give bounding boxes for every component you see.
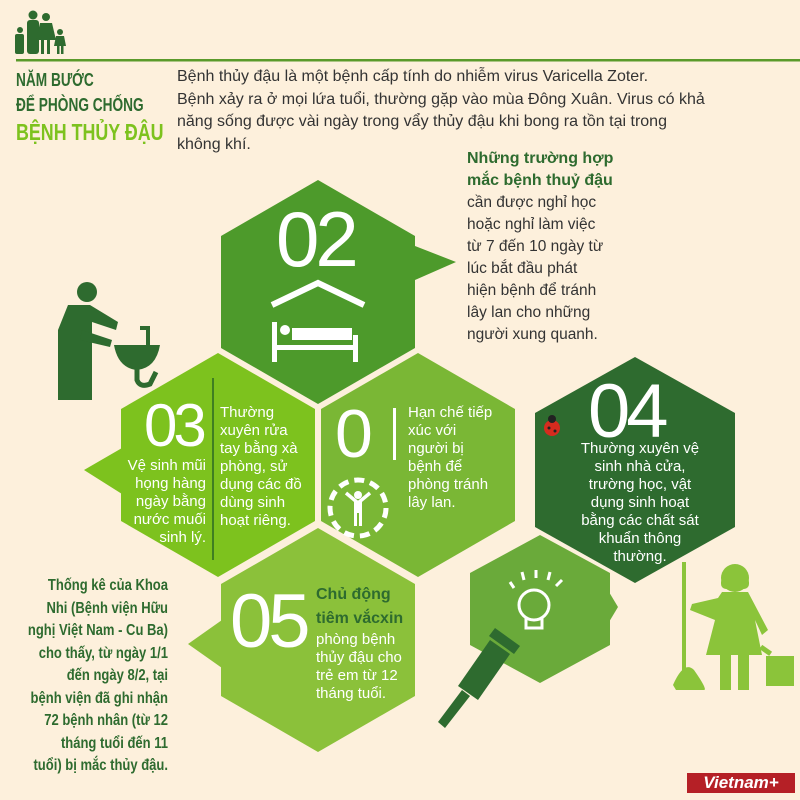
number 03: 03 xyxy=(144,392,203,459)
text 05: Chủ động xyxy=(316,586,391,603)
title: BỆNH THỦY ĐẬU xyxy=(16,119,164,145)
callout: step 02 text: lây lan cho những xyxy=(467,304,590,321)
text 01: Hạn chế tiếp xyxy=(408,404,492,421)
icon: ladybug xyxy=(544,415,560,436)
text 05: tiêm vắcxin xyxy=(316,610,403,627)
text 05: thủy đậu cho xyxy=(316,649,402,666)
text 05 xyxy=(316,586,403,702)
stats text: đến ngày 8/2, tại xyxy=(67,667,168,684)
text 03 left xyxy=(128,457,206,546)
callout: step 02 text: Những trường hợp xyxy=(467,150,613,167)
intro text: Bệnh xảy ra ở mọi lứa tuổi, thường gặp vào mùa Đông Xuân. Virus có khả xyxy=(177,90,705,108)
text 01 xyxy=(408,404,492,511)
text 01: xúc với xyxy=(408,422,456,439)
text 04: bằng các chất sát xyxy=(581,512,699,529)
text 01: người bị xyxy=(408,440,464,457)
callout: step 02 text: hoặc nghỉ làm việc xyxy=(467,216,595,233)
text 03 right: phòng, sử xyxy=(220,458,288,475)
text 03 left: họng hàng xyxy=(135,475,206,492)
text 04: sinh nhà cửa, xyxy=(595,458,685,475)
text 03 left: nước muối xyxy=(134,511,206,528)
text 03 left: sinh lý. xyxy=(159,529,206,546)
text 01: bệnh để xyxy=(408,458,462,475)
text 05: trẻ em từ 12 xyxy=(316,667,398,684)
intro text xyxy=(177,67,705,152)
text 01: phòng tránh xyxy=(408,476,488,493)
intro text: năng sống được vài ngày trong vẩy thủy đậu khi bong ra tồn tại trong xyxy=(177,113,667,130)
callout: step 02 text: cần được nghỉ học xyxy=(467,194,596,211)
number 05: 05 xyxy=(230,579,307,664)
text 04 xyxy=(581,440,699,565)
title xyxy=(16,69,164,145)
text 04: thường. xyxy=(613,548,667,565)
intro text: Bệnh thủy đậu là một bệnh cấp tính do nhiễm virus Varicella Zoter. xyxy=(177,68,648,85)
logo: Vietnam+ xyxy=(703,773,779,792)
stats text: cho thấy, từ ngày 1/1 xyxy=(39,644,168,662)
number 02: 02 xyxy=(276,195,355,283)
stats text: tháng tuổi đến 11 xyxy=(61,734,168,752)
callout: step 02 text: hiện bệnh để tránh xyxy=(467,282,596,299)
callout: step 02 text xyxy=(467,150,613,343)
icon: woman cleaning xyxy=(673,562,794,690)
stats text: Thống kê của Khoa xyxy=(48,577,168,594)
icon: person in dashed circle xyxy=(330,480,386,536)
text 03 right: xuyên rửa xyxy=(220,422,288,439)
number 01: 0 xyxy=(335,396,369,472)
stats text: bệnh viện đã ghi nhận xyxy=(31,690,168,706)
text 03 right xyxy=(220,404,302,529)
callout: step 02 text: lúc bắt đầu phát xyxy=(467,260,577,277)
text 01: lây lan. xyxy=(408,494,456,511)
text 05: tháng tuổi. xyxy=(316,685,386,702)
text 03 right: dùng sinh xyxy=(220,494,285,511)
text 03 left: Vệ sinh mũi xyxy=(128,457,206,474)
hexagons xyxy=(221,180,415,404)
callout: step 02 text: mắc bệnh thuỷ đậu xyxy=(467,172,613,189)
text 04: dụng sinh hoạt xyxy=(591,494,689,511)
title: ĐỂ PHÒNG CHỐNG xyxy=(16,95,144,115)
stats text: nghị Việt Nam - Cu Ba) xyxy=(28,622,168,639)
stats text: Nhi (Bệnh viện Hữu xyxy=(46,600,168,616)
text 05: phòng bệnh xyxy=(316,631,395,648)
icon: bulb and syringe xyxy=(438,570,562,728)
icon: family xyxy=(15,10,66,54)
stats text: 72 bệnh nhân (từ 12 xyxy=(44,712,168,729)
title: NĂM BƯỚC xyxy=(16,70,94,90)
number 04: 04 xyxy=(588,369,665,454)
text 04: khuẩn thông xyxy=(599,530,681,547)
text 04: trường học, vật xyxy=(589,476,691,493)
callout: step 02 text: từ 7 đến 10 ngày từ xyxy=(467,238,603,255)
stats text: tuổi) bị mắc thủy đậu. xyxy=(33,757,168,774)
text 03 right: tay bằng xà xyxy=(220,440,298,457)
icon: roof and bed xyxy=(272,283,364,305)
text 03 right: Thường xyxy=(220,404,274,421)
logo xyxy=(687,773,795,793)
text 04: Thường xuyên vệ xyxy=(581,440,699,457)
callout: step 02 text: người xung quanh. xyxy=(467,326,598,343)
intro text: không khí. xyxy=(177,136,251,152)
text 03 right: dụng các đồ xyxy=(220,476,302,493)
stats text xyxy=(28,577,168,774)
icon: man washing hands xyxy=(58,282,160,400)
text 03 left: ngày bằng xyxy=(136,493,206,510)
text 03 right: hoạt riêng. xyxy=(220,512,291,529)
